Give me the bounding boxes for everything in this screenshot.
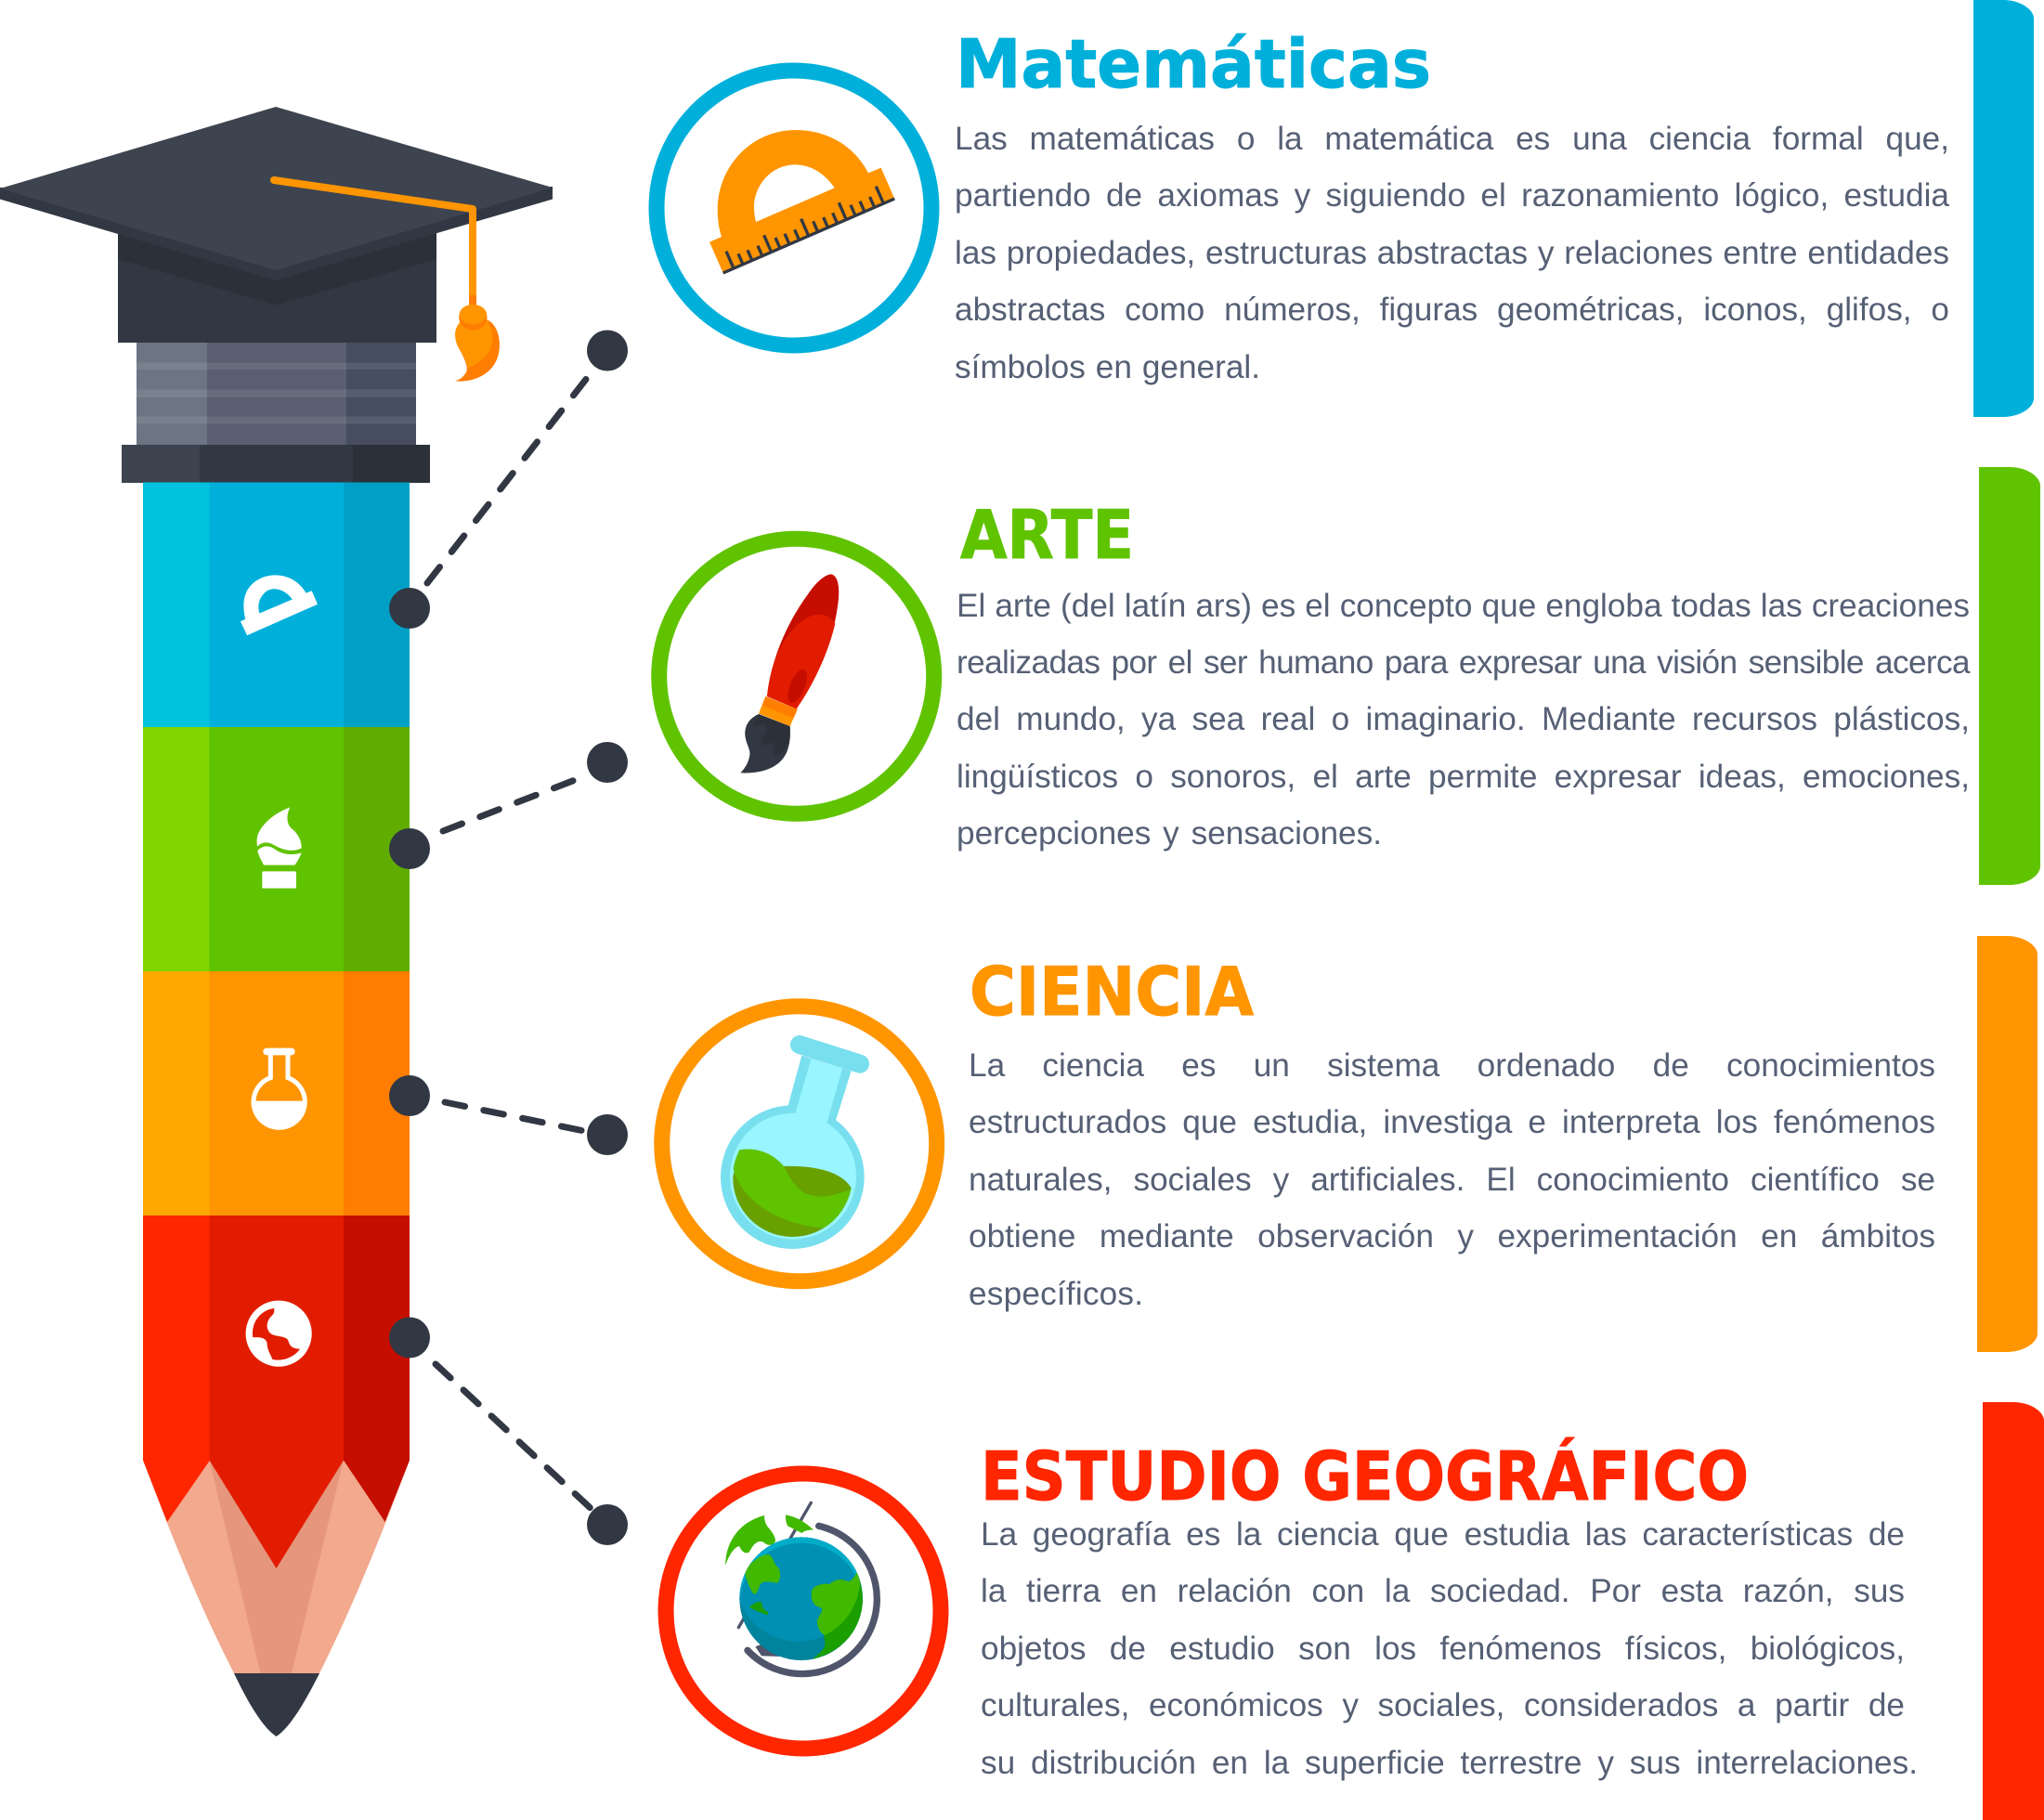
text block: estudio geográfico: su distribución en la superficie terrestre y sus interrelaciones. <box>981 1745 1918 1781</box>
icon: flask <box>721 1045 865 1249</box>
text block: estudio geográfico: La geografía es la ciencia que estudia las características de <box>981 1516 1905 1553</box>
text block: ciencia <box>969 1047 1935 1312</box>
text block: matemáticas: partiendo de axiomas y siguiendo el razonamiento lógico, estudia <box>955 177 1949 214</box>
text block: ciencia: obtiene mediante observación y experimentación en ámbitos <box>969 1218 1935 1254</box>
text block: arte: lingüísticos o sonoros, el arte permite expresar ideas, emociones, <box>957 759 1970 795</box>
text block: ciencia: naturales, sociales y artificiales. El conocimiento científico se <box>969 1162 1935 1198</box>
icon: white globe <box>246 1301 312 1367</box>
text block: arte: realizadas por el ser humano para expresar una visión sensible acerca <box>957 644 1970 681</box>
icon: white protractor <box>241 575 318 635</box>
tassel <box>274 180 500 382</box>
text block: ciencia: La ciencia es un sistema ordenado de conocimientos <box>969 1047 1935 1084</box>
icon: globe <box>725 1502 877 1674</box>
heading: CIENCIA: CIENCIA <box>970 953 1254 1031</box>
icon: paintbrush <box>740 574 839 773</box>
text block: estudio geográfico: objetos de estudio son los fenómenos físicos, biológicos, <box>981 1631 1905 1667</box>
side tab: red <box>1983 1402 2044 1820</box>
badge: flask <box>662 1007 937 1281</box>
text block: estudio geográfico: culturales, económicos y sociales, considerados a partir de <box>981 1687 1905 1723</box>
pencil segment: red with wood tip <box>143 1216 410 1736</box>
badge: paintbrush <box>659 539 934 813</box>
text block: estudio geográfico <box>981 1516 1918 1781</box>
text block: arte: El arte (del latín ars) es el concepto que engloba todas las creaciones <box>957 587 1970 624</box>
pencil segment: blue <box>143 483 410 727</box>
text block: matemáticas: símbolos en general. <box>955 349 1260 385</box>
text block: arte <box>957 587 1971 852</box>
side tab: blue <box>1973 0 2034 417</box>
badge: protractor <box>657 71 931 345</box>
side tab: green <box>1979 467 2040 885</box>
ferrule <box>137 343 416 445</box>
connector: ciencia <box>389 1075 628 1155</box>
connector: arte <box>389 742 628 869</box>
badge: globe <box>666 1474 941 1748</box>
heading: Matemáticas: Matemáticas <box>956 25 1431 103</box>
text block: ciencia: específicos. <box>969 1276 1143 1312</box>
text block: matemáticas: las propiedades, estructuras abstractas y relaciones entre entidades <box>955 235 1949 271</box>
text block: matemáticas: Las matemáticas o la matemática es una ciencia formal que, <box>955 121 1949 157</box>
collar <box>122 445 430 483</box>
icon: protractor <box>710 130 894 273</box>
pencil segment: orange <box>143 971 410 1216</box>
connector: matemáticas <box>389 331 628 629</box>
side tab: orange <box>1977 936 2037 1352</box>
heading: ARTE: ARTE <box>960 496 1134 574</box>
heading: ESTUDIO GEOGRÁFICO: ESTUDIO GEOGRÁFICO <box>981 1437 1749 1515</box>
graduation cap <box>0 107 553 382</box>
text block: estudio geográfico: la tierra en relación con la sociedad. Por esta razón, sus <box>981 1573 1905 1609</box>
text block: matemáticas <box>955 121 1949 385</box>
pencil segment: green <box>143 727 410 971</box>
connector: estudio geográfico <box>389 1317 628 1545</box>
text block: ciencia: estructurados que estudia, investiga e interpreta los fenómenos <box>969 1104 1935 1140</box>
text block: arte: percepciones y sensaciones. <box>957 815 1382 852</box>
icon: white paintbrush <box>257 807 302 889</box>
pencil with graduation cap <box>0 107 553 1736</box>
icon: white flask <box>254 1048 305 1127</box>
text block: arte: del mundo, ya sea real o imaginario. Mediante recursos plásticos, <box>957 701 1970 737</box>
text block: matemáticas: abstractas como números, figuras geométricas, iconos, glifos, o <box>955 292 1949 328</box>
